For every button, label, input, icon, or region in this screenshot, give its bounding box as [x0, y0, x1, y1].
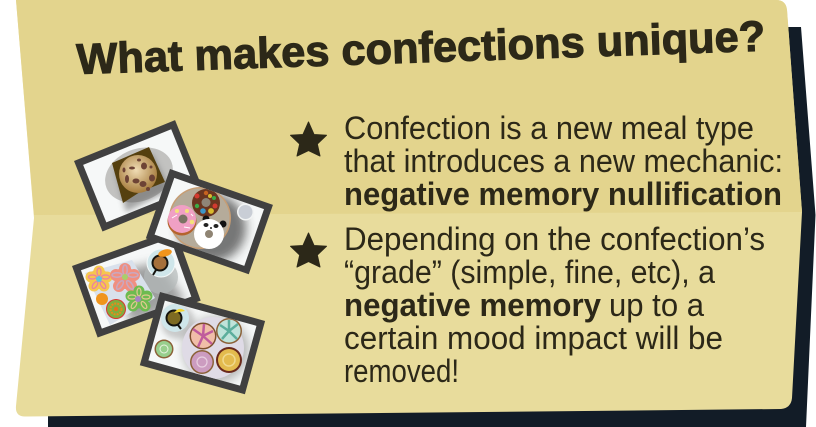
green cupcake	[154, 340, 174, 358]
text block 1: that introduces a new mechanic:	[344, 143, 783, 179]
text block 2: negative memory	[344, 287, 601, 323]
text block 2	[344, 221, 765, 389]
star bullet 1	[290, 122, 326, 156]
tea cup	[161, 304, 189, 332]
text block 2: Depending on the confection’s	[344, 221, 765, 257]
text block 2: up to a	[609, 287, 704, 323]
text block 2: “grade” (simple, fine, etc), a	[344, 254, 715, 290]
yellow cupcake	[216, 347, 242, 373]
pink flower cookie	[110, 263, 140, 292]
panda donut	[194, 216, 226, 249]
card: donuts	[146, 169, 273, 274]
card: cookie	[74, 120, 199, 232]
small cup	[237, 204, 252, 220]
title: What makes confections unique?	[76, 13, 766, 84]
pink cupcake	[190, 322, 216, 350]
text block 1: Confection is a new meal type	[344, 110, 754, 146]
text block 1	[344, 110, 783, 212]
card: cookies and coffee	[72, 239, 201, 338]
mauve cupcake	[190, 350, 214, 374]
yellow flower cookie	[86, 266, 112, 292]
pink donut	[168, 205, 196, 236]
text block 2: certain mood impact will be	[344, 320, 723, 356]
chocolate donut	[192, 189, 220, 217]
teal cupcake	[216, 318, 242, 344]
text block 2: removed!	[344, 353, 459, 389]
food photo illustrations	[72, 120, 273, 394]
coffee cup	[147, 248, 175, 277]
card: cupcakes and tea	[140, 292, 266, 394]
green flower cookie	[126, 286, 152, 312]
text block 1: negative memory nullification	[344, 176, 782, 212]
star bullet 2	[290, 233, 326, 267]
